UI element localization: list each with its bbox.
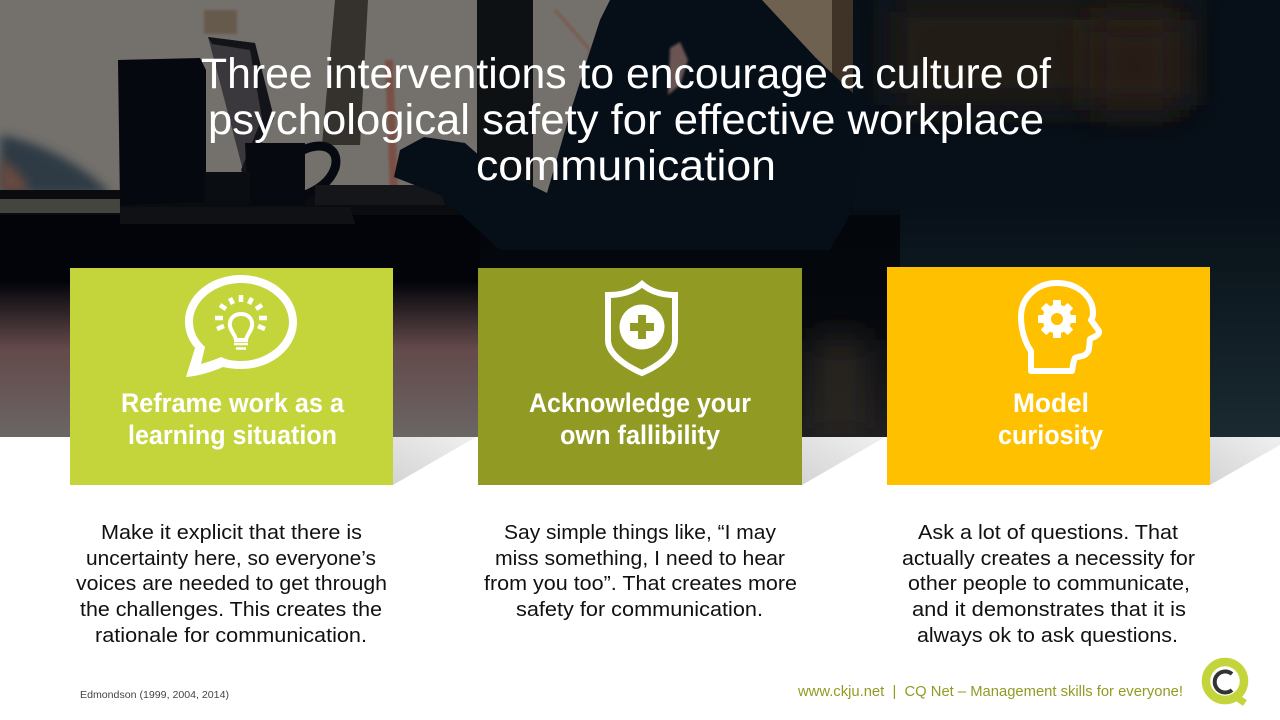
text block: acknowledge fallibility: from you too”. That creates more [484,573,797,595]
text block: reframe work: uncertainty here, so everyone’s [86,548,376,570]
heading: acknowledge fallibility: own fallibility [560,420,720,450]
panel: reframe work [70,268,393,485]
text block: acknowledge fallibility: miss something, I need to hear [495,548,785,570]
text block: model curiosity: actually creates a necessity for [902,548,1195,570]
heading: reframe work: Reframe work as a [121,388,345,418]
icon: speech bubble with light bulb [185,275,297,377]
heading: model curiosity: curiosity [998,420,1103,450]
citation: Edmondson (1999, 2004, 2014) [80,689,229,701]
page footer background [0,437,1280,720]
icon: shield with plus [608,284,675,373]
logo: CQ [1206,662,1245,703]
text block: acknowledge fallibility [484,522,797,621]
heading: model curiosity [998,388,1103,450]
icon: head with gear [1021,283,1099,371]
panel: acknowledge fallibility [478,268,802,485]
text block: acknowledge fallibility: Say simple things like, “I may [504,522,776,544]
title: communication [476,142,776,190]
heading: acknowledge fallibility [529,388,751,450]
text block: acknowledge fallibility: safety for communication. [516,599,763,621]
text block: reframe work: the challenges. This creates the [80,599,382,621]
panel: model curiosity [887,267,1210,485]
title: Three interventions to encourage a culture of [201,50,1052,98]
title: psychological safety for effective workplace [208,96,1044,144]
text block: model curiosity: Ask a lot of questions. That [918,522,1178,544]
heading: reframe work: learning situation [128,420,337,450]
background photo: silhouette at a desk [0,0,1280,440]
footer link text: www.ckju.net | CQ Net – Management skills for everyone! [797,684,1183,700]
text block: model curiosity: other people to communicate, [908,573,1190,595]
text block: reframe work [76,522,387,647]
text block: reframe work: voices are needed to get through [76,573,387,595]
title [201,50,1052,190]
card shadows [393,437,1280,485]
text block: model curiosity: and it demonstrates that it is [912,599,1186,621]
text block: model curiosity: always ok to ask questions. [917,625,1178,647]
heading: acknowledge fallibility: Acknowledge your [529,388,751,418]
text block: reframe work: Make it explicit that there is [101,522,362,544]
heading: reframe work [121,388,345,450]
text block: model curiosity [902,522,1195,647]
text block: reframe work: rationale for communication. [95,625,367,647]
heading: model curiosity: Model [1013,388,1089,418]
